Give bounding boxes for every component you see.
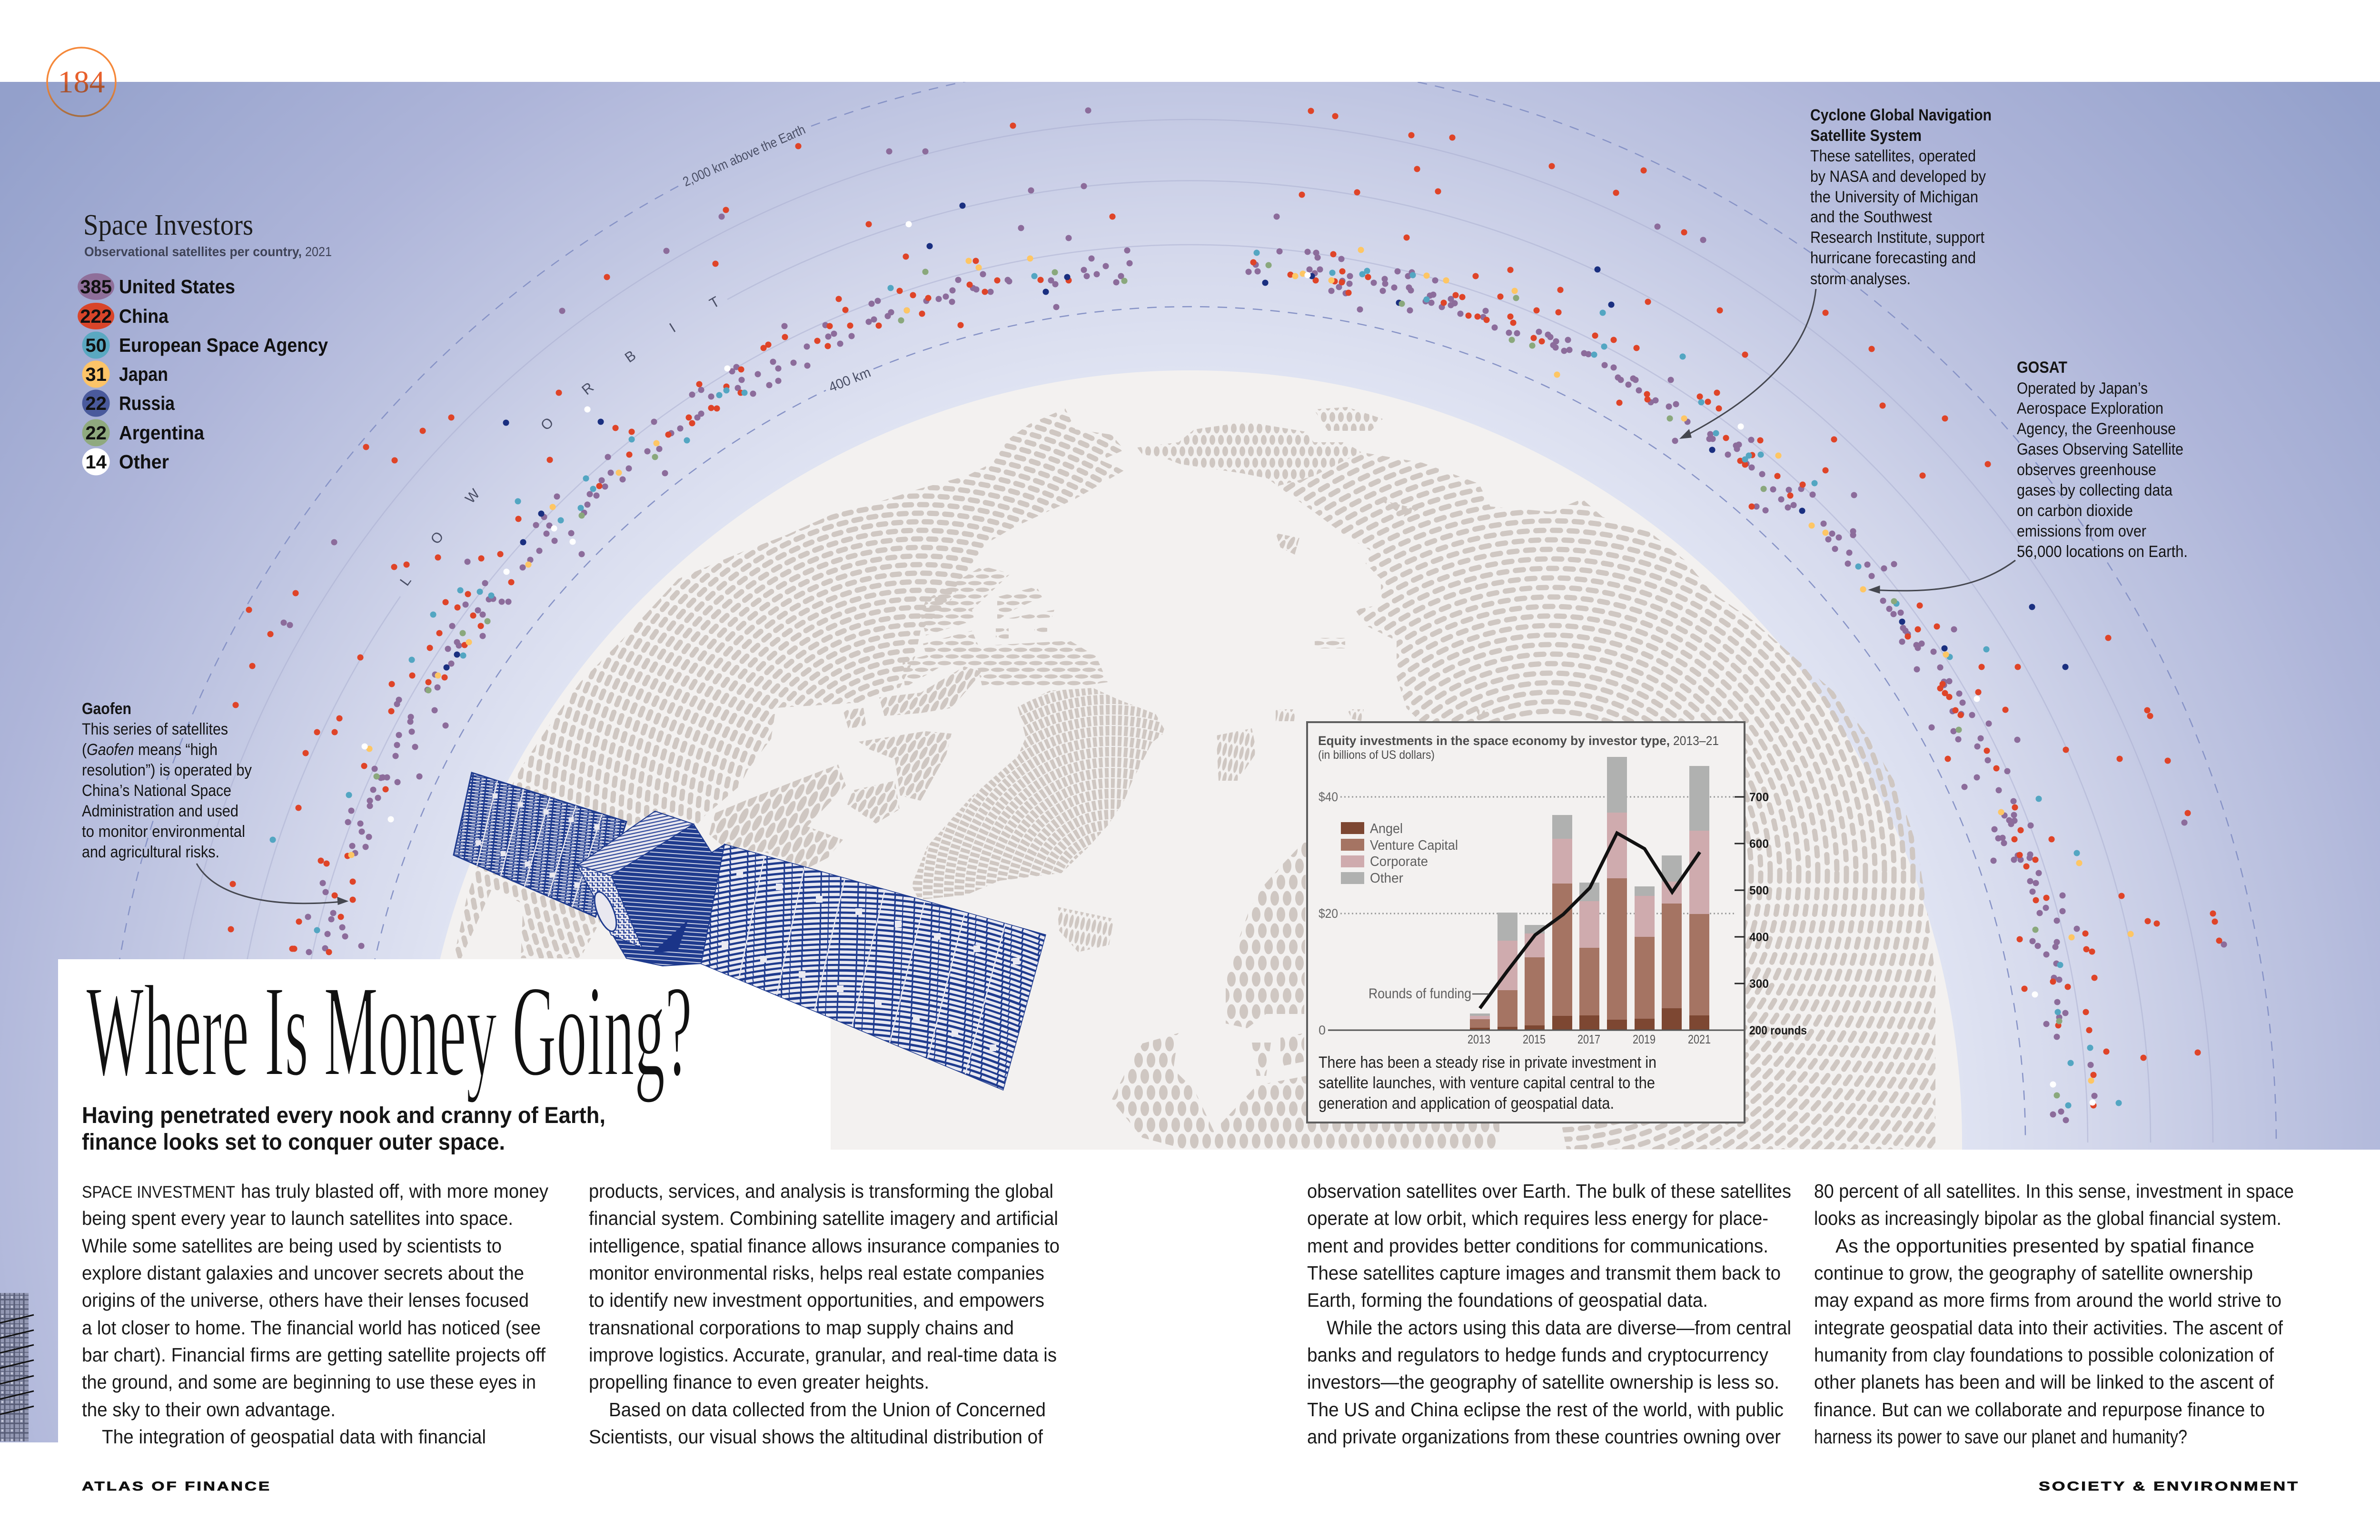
arrow: GOSAT bbox=[1870, 560, 2015, 593]
callout: Cyclone: Satellite System bbox=[1810, 127, 1922, 145]
background: space gradient bbox=[0, 82, 2380, 1150]
legend heading: Observational satellites per country, bbox=[84, 244, 302, 259]
body text column 3: investors—the geography of satellite ownership is less so. bbox=[1307, 1371, 1779, 1393]
callout: GOSAT: Agency, the Greenhouse bbox=[2017, 420, 2176, 438]
body text column 4: 80 percent of all satellites. In this sense, investment in space bbox=[1814, 1180, 2294, 1202]
body text column 4: other planets has been and will be linked to the ascent of bbox=[1814, 1371, 2274, 1393]
footer left: ATLAS OF FINANCE bbox=[82, 1479, 271, 1493]
body text column 1: the ground, and some are beginning to use these eyes in bbox=[82, 1371, 536, 1393]
orbit labels: 400 km bbox=[827, 365, 873, 395]
callout: Gaofen: This series of satellites bbox=[82, 720, 228, 738]
legend names: United States bbox=[119, 276, 235, 298]
body text column 3: banks and regulators to hedge funds and cryptocurrency bbox=[1307, 1344, 1768, 1366]
footer right: SOCIETY & ENVIRONMENT bbox=[2039, 1479, 2300, 1493]
legend names bbox=[119, 276, 328, 473]
body text column 3: and private organizations from these countries owning over bbox=[1307, 1426, 1781, 1448]
x axis and years bbox=[1328, 1030, 1745, 1046]
callout: GOSAT bbox=[2017, 358, 2188, 561]
right axis rounds: 400 bbox=[1749, 931, 1769, 944]
callout: Gaofen: to monitor environmental bbox=[82, 823, 245, 841]
stacked bars bbox=[1470, 757, 1709, 1030]
arrow: Gaofen bbox=[197, 864, 347, 904]
chart title: 2013–21 bbox=[1673, 734, 1719, 748]
funding rounds line: Rounds of funding bbox=[1368, 986, 1471, 1002]
orbit labels: T bbox=[707, 294, 722, 312]
legend: space investors bbox=[78, 209, 332, 475]
chart legend bbox=[1341, 821, 1458, 886]
y axis gridlines and labels bbox=[1319, 790, 1734, 1037]
x axis and years: 2017 bbox=[1577, 1032, 1600, 1046]
body text column 2: Scientists, our visual shows the altitudinal distribution of bbox=[589, 1426, 1043, 1448]
body text column 1: has truly blasted off, with more money bbox=[241, 1180, 548, 1202]
subtitle: Having penetrated every nook and cranny of Earth, bbox=[82, 1103, 605, 1128]
legend names: Argentina bbox=[119, 422, 205, 444]
page edge texture bbox=[0, 1293, 34, 1441]
callout: Cyclone: Cyclone Global Navigation bbox=[1810, 106, 1992, 124]
chart caption: satellite launches, with venture capital central to the bbox=[1319, 1074, 1655, 1092]
page number bbox=[47, 48, 116, 116]
legend names: China bbox=[119, 305, 169, 327]
body text column 1: being spent every year to launch satellites into space. bbox=[82, 1207, 513, 1229]
orbit labels: L bbox=[397, 573, 415, 589]
callout: GOSAT: 56,000 locations on Earth. bbox=[2017, 543, 2188, 561]
callout: GOSAT: gases by collecting data bbox=[2017, 481, 2172, 499]
callout: Cyclone: storm analyses. bbox=[1810, 270, 1911, 288]
orbit labels: I bbox=[667, 320, 678, 336]
callout: Gaofen: Administration and used bbox=[82, 802, 238, 820]
y axis gridlines and labels: 0 bbox=[1319, 1023, 1326, 1037]
body text column 4: humanity from clay foundations to possible colonization of bbox=[1814, 1344, 2274, 1366]
legend values bbox=[80, 277, 112, 473]
right axis rounds: 700 bbox=[1749, 791, 1769, 804]
chart legend: Angel bbox=[1370, 821, 1403, 836]
orbit labels: O bbox=[427, 529, 447, 547]
right axis rounds: 300 bbox=[1749, 977, 1769, 991]
callout: GOSAT: emissions from over bbox=[2017, 522, 2146, 540]
body text column 1: The integration of geospatial data with financial bbox=[102, 1426, 486, 1448]
x axis and years: 2013 bbox=[1468, 1032, 1490, 1046]
body text column 2: intelligence, spatial finance allows insurance companies to bbox=[589, 1235, 1060, 1257]
body text column 1: SPACE INVESTMENT bbox=[82, 1183, 235, 1202]
callout: Gaofen: China’s National Space bbox=[82, 782, 231, 800]
earth land: dotted map bbox=[424, 273, 2151, 1473]
body text column 4 bbox=[1814, 1180, 2294, 1448]
right axis rounds bbox=[1735, 791, 1807, 1037]
callout: Cyclone: the University of Michigan bbox=[1810, 188, 1978, 206]
body text column 1: the sky to their own advantage. bbox=[82, 1399, 336, 1421]
chart title bbox=[1318, 734, 1719, 762]
body text column 2: products, services, and analysis is transforming the global bbox=[589, 1180, 1053, 1202]
right axis rounds: 600 bbox=[1749, 837, 1769, 851]
body text column 1: While some satellites are being used by scientists to bbox=[82, 1235, 502, 1257]
body text column 3 bbox=[1307, 1180, 1791, 1448]
x axis and years: 2021 bbox=[1688, 1032, 1711, 1046]
callout: GOSAT: Operated by Japan’s bbox=[2017, 379, 2148, 397]
body text column 2: to identify new investment opportunities, and empowers bbox=[589, 1289, 1044, 1311]
arrow: Cyclone bbox=[1681, 289, 1816, 438]
body text column 1: a lot closer to home. The financial world has noticed (see bbox=[82, 1317, 541, 1339]
body text column 3: These satellites capture images and transmit them back to bbox=[1307, 1262, 1781, 1284]
body text column 2: improve logistics. Accurate, granular, and real-time data is bbox=[589, 1344, 1057, 1366]
right axis rounds: 200 rounds bbox=[1749, 1024, 1807, 1037]
body text column 4: looks as increasingly bipolar as the global financial system. bbox=[1814, 1207, 2281, 1229]
body text column 2: Based on data collected from the Union of Concerned bbox=[609, 1399, 1046, 1421]
body text column 3: The US and China eclipse the rest of the world, with public bbox=[1307, 1399, 1784, 1421]
satellite illustration bbox=[454, 773, 1052, 1116]
chart caption: There has been a steady rise in private investment in bbox=[1319, 1053, 1656, 1072]
text: Where Is Money Going? bbox=[86, 959, 692, 1103]
body text column 1: origins of the universe, others have their lenses focused bbox=[82, 1289, 529, 1311]
orbit labels: 2,000 km above the Earth bbox=[681, 122, 807, 189]
callout: GOSAT: on carbon dioxide bbox=[2017, 502, 2133, 520]
orbit labels: W bbox=[462, 486, 483, 507]
legend names: Japan bbox=[119, 363, 168, 385]
callout: Cyclone: These satellites, operated bbox=[1810, 147, 1976, 165]
chart title: (in billions of US dollars) bbox=[1318, 748, 1435, 762]
body text column 3: ment and provides better conditions for communications. bbox=[1307, 1235, 1768, 1257]
callout: Cyclone: Research Institute, support bbox=[1810, 229, 1984, 247]
callout: Cyclone: and the Southwest bbox=[1810, 208, 1932, 226]
callout: Gaofen: Gaofen bbox=[82, 700, 131, 718]
body text column 1: explore distant galaxies and uncover secrets about the bbox=[82, 1262, 524, 1284]
body text column 4: may expand as more firms from around the world strive to bbox=[1814, 1289, 2281, 1311]
body text column 3: observation satellites over Earth. The bulk of these satellites bbox=[1307, 1180, 1791, 1202]
satellite left panel bbox=[454, 773, 626, 917]
legend heading: 2021 bbox=[305, 244, 332, 259]
page number: 184 bbox=[58, 65, 105, 99]
body text column 4: As the opportunities presented by spatial finance bbox=[1835, 1235, 2254, 1257]
legend values: 222 bbox=[80, 306, 112, 327]
legend circles bbox=[78, 273, 114, 475]
callout: Gaofen: and agricultural risks. bbox=[82, 843, 219, 861]
x axis and years: 2015 bbox=[1523, 1032, 1546, 1046]
bar chart panel bbox=[1307, 722, 1807, 1123]
body text column 1: bar chart). Financial firms are getting satellite projects off bbox=[82, 1344, 546, 1366]
legend names: European Space Agency bbox=[119, 334, 328, 356]
chart legend: Other bbox=[1370, 871, 1403, 886]
legend heading bbox=[83, 209, 332, 259]
body text column 4: integrate geospatial data into their activities. The ascent of bbox=[1814, 1317, 2283, 1339]
body text column 3: Earth, forming the foundations of geospatial data. bbox=[1307, 1289, 1708, 1311]
orbit labels: B bbox=[622, 348, 639, 366]
right axis rounds: 500 bbox=[1749, 884, 1769, 897]
chart caption bbox=[1319, 1053, 1656, 1113]
chart legend: Corporate bbox=[1370, 854, 1428, 869]
left margin strip bbox=[0, 1150, 58, 1442]
y axis gridlines and labels: $40 bbox=[1319, 790, 1338, 804]
legend values: 22 bbox=[85, 423, 107, 444]
body text column 4: continue to grow, the geography of satellite ownership bbox=[1814, 1262, 2253, 1284]
body text column 3: operate at low orbit, which requires less energy for place- bbox=[1307, 1207, 1768, 1229]
satellite body bbox=[577, 811, 724, 966]
legend values: 31 bbox=[85, 364, 107, 385]
body text column 1 bbox=[82, 1180, 548, 1448]
funding rounds line bbox=[1368, 833, 1700, 1008]
callout: Cyclone: by NASA and developed by bbox=[1810, 168, 1986, 186]
subtitle bbox=[82, 1103, 605, 1155]
body text column 2: financial system. Combining satellite imagery and artificial bbox=[589, 1207, 1058, 1229]
legend values: 14 bbox=[85, 452, 107, 473]
x axis and years: 2019 bbox=[1633, 1032, 1656, 1046]
orbit labels: O bbox=[538, 415, 556, 434]
callout: Gaofen: resolution”) is operated by bbox=[82, 761, 252, 779]
legend heading: Space Investors bbox=[83, 209, 253, 241]
y axis gridlines and labels: $20 bbox=[1319, 906, 1338, 921]
body text column 2: transnational corporations to map supply chains and bbox=[589, 1317, 1014, 1339]
callout: Gaofen: (Gaofen means “high bbox=[82, 741, 218, 759]
chart legend: Venture Capital bbox=[1370, 838, 1458, 853]
callout: GOSAT: Gases Observing Satellite bbox=[2017, 440, 2183, 458]
callout: GOSAT: Aerospace Exploration bbox=[2017, 399, 2163, 417]
chart title: Equity investments in the space economy by investor type, bbox=[1318, 734, 1670, 748]
body text column 3: While the actors using this data are diverse—from central bbox=[1327, 1317, 1791, 1339]
legend values: 50 bbox=[85, 335, 107, 356]
earth globe disc bbox=[418, 370, 1962, 1150]
callout: Cyclone: hurricane forecasting and bbox=[1810, 249, 1976, 267]
callout: Gaofen bbox=[82, 700, 252, 861]
orbit labels bbox=[397, 122, 873, 589]
legend names: Other bbox=[119, 451, 169, 473]
body text column 4: harness its power to save our planet and humanity? bbox=[1814, 1426, 2187, 1448]
orbit rings bbox=[104, 58, 2276, 1143]
subtitle: finance looks set to conquer outer space. bbox=[82, 1130, 505, 1155]
body text column 2: propelling finance to even greater heights. bbox=[589, 1371, 929, 1393]
callout: Cyclone bbox=[1810, 106, 1992, 288]
orbit labels: R bbox=[579, 379, 597, 398]
satellite right panel bbox=[701, 844, 1046, 1091]
chart caption: generation and application of geospatial data. bbox=[1319, 1094, 1614, 1113]
legend values: 22 bbox=[85, 393, 107, 414]
satellites scatter: dots by operator bbox=[231, 110, 2224, 1120]
body text column 4: finance. But can we collaborate and repurpose finance to bbox=[1814, 1399, 2265, 1421]
legend values: 385 bbox=[80, 277, 112, 298]
body text column 2: monitor environmental risks, helps real estate companies bbox=[589, 1262, 1044, 1284]
legend names: Russia bbox=[119, 392, 175, 414]
callout: GOSAT: GOSAT bbox=[2017, 358, 2067, 377]
body text column 2 bbox=[589, 1180, 1060, 1448]
callout: GOSAT: observes greenhouse bbox=[2017, 461, 2156, 479]
